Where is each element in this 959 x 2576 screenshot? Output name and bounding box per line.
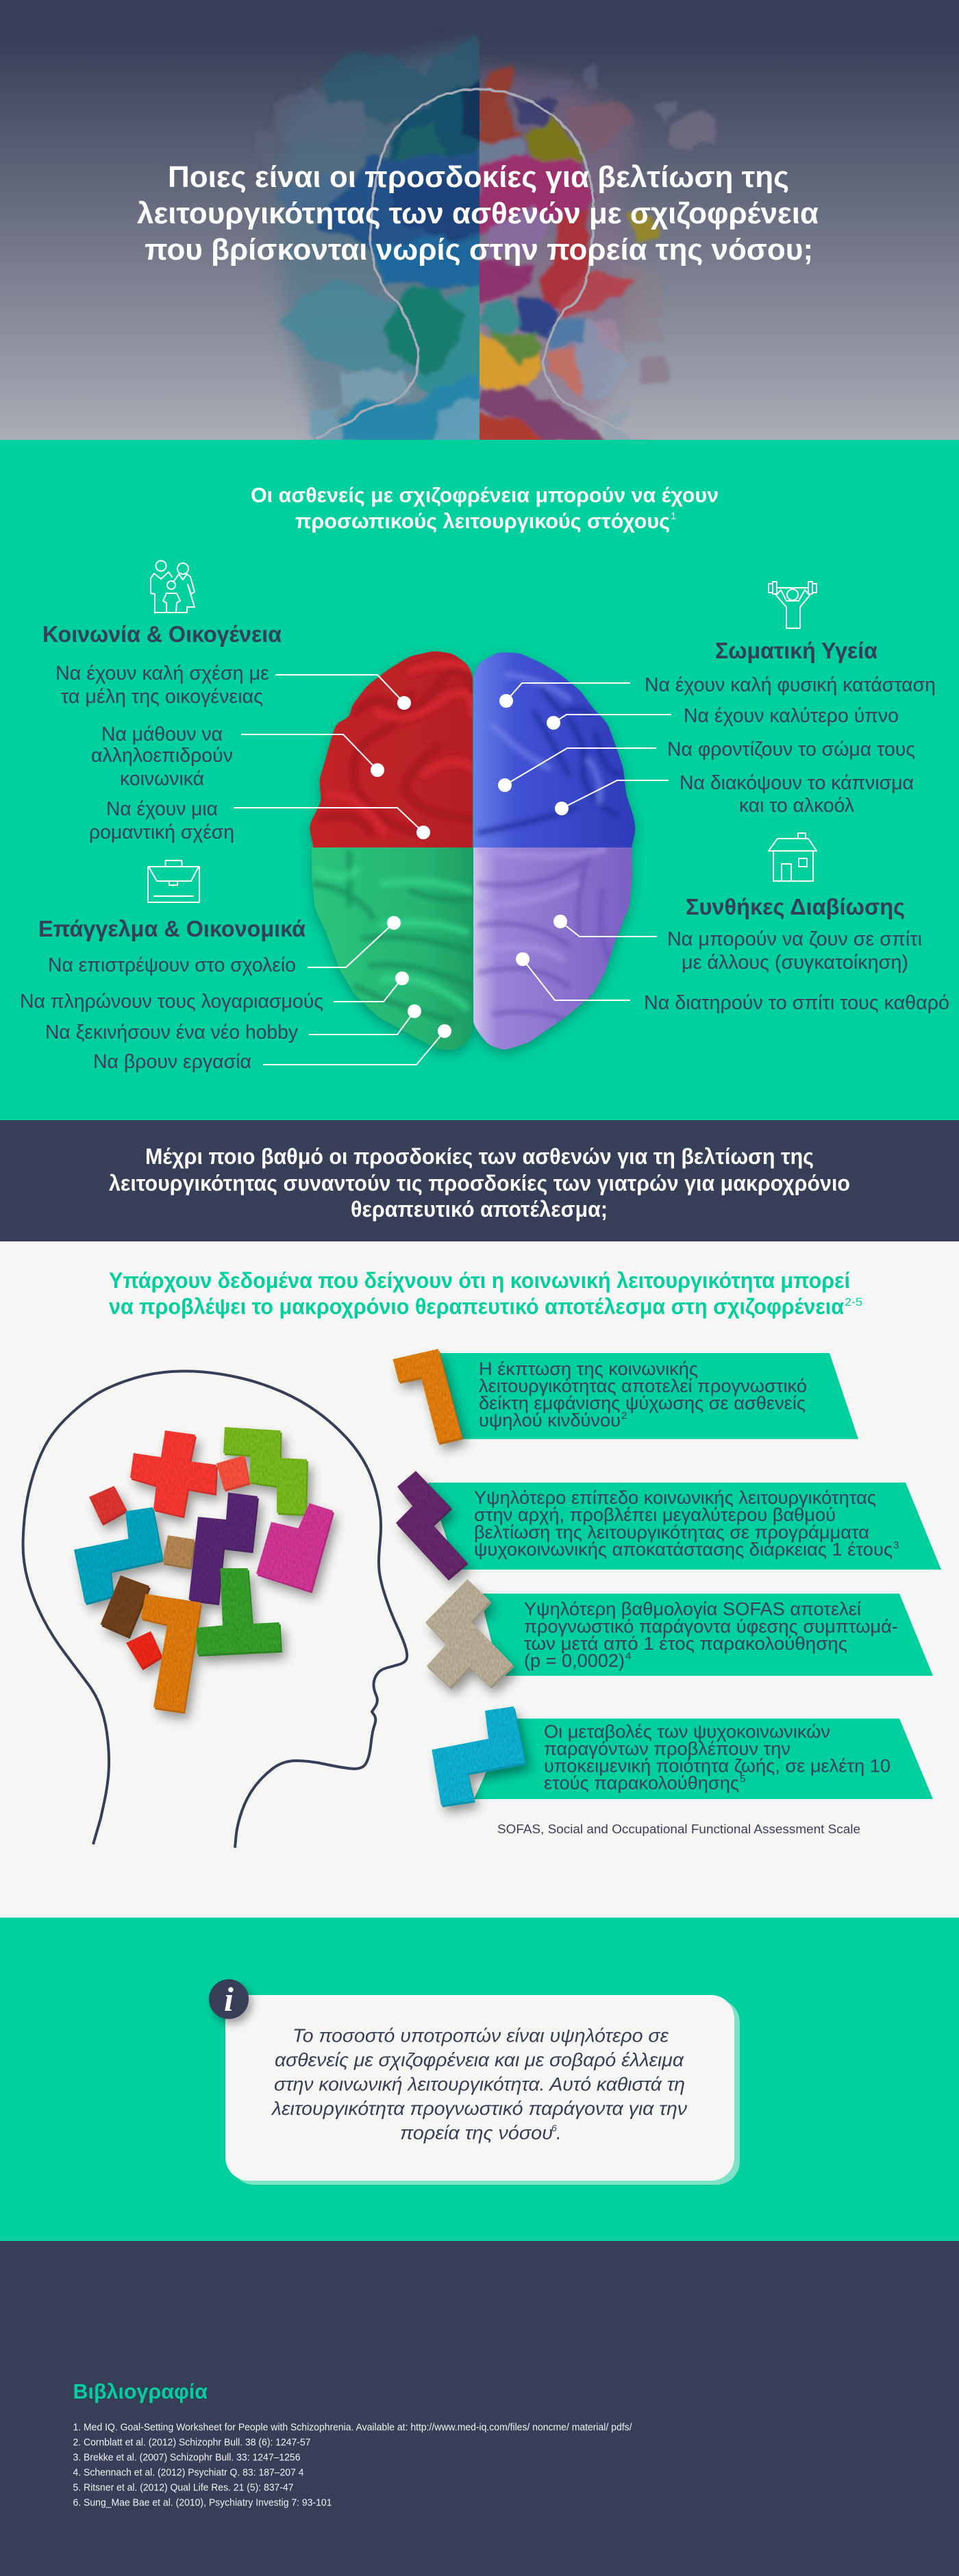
finding 2: βελτίωση της λειτουργικότητας σε προγράμματα	[474, 1522, 869, 1543]
callout text: στην κοινωνική λειτουργικότητα. Αυτό καθιστά τη	[274, 2073, 685, 2095]
occupation and finances goals: Να βρουν εργασία	[93, 1051, 251, 1073]
physical health goals: Να έχουν καλή φυσική κατάσταση	[645, 674, 936, 696]
occupation and finances goals: Να επιστρέψουν στο σχολείο	[48, 954, 296, 976]
finding 1: δείκτη εμφάνισης ψύχωσης σε ασθενείς	[479, 1393, 806, 1413]
finding 1: λειτουργικότητας αποτελεί προγνωστικό	[479, 1376, 807, 1396]
brain illustration	[301, 644, 641, 1062]
physical health goals: Να έχουν καλύτερο ύπνο	[684, 705, 899, 727]
panel: references	[0, 2241, 959, 2576]
finding 4: ετούς παρακολούθησης	[544, 1773, 739, 1794]
finding 2: ψυχοκοινωνικής αποκατάστασης διάρκειας 1 έτους	[474, 1539, 893, 1559]
references list: 3. Brekke et al. (2007) Schizophr Bull. 33: 1247–1256	[73, 2453, 300, 2464]
category heading: occupation and finances: Επάγγελμα & Οικονομικά	[38, 916, 306, 941]
connector lines and dots	[234, 675, 671, 1065]
category heading: living conditions: Συνθήκες Διαβίωσης	[686, 894, 905, 919]
references heading: Βιβλιογραφία	[73, 2379, 208, 2403]
brain: blue quadrant	[473, 644, 641, 863]
head outline	[318, 89, 636, 438]
question text: Μέχρι ποιο βαθμό οι προσδοκίες των ασθενών για τη βελτίωση της	[145, 1144, 814, 1169]
question text: θεραπευτικό αποτέλεσμα;	[351, 1197, 608, 1222]
panel: hero	[0, 0, 959, 445]
section heading: προσωπικούς λειτουργικούς στόχους	[295, 509, 670, 533]
society and family goals: τα μέλη της οικογένειας	[61, 686, 263, 708]
references list: 4. Schennach et al. (2012) Psychiatr Q. 83: 187–207 4	[73, 2468, 304, 2479]
question text	[109, 1144, 850, 1222]
finding 4: υποκειμενική ποιότητα ζωής, σε μελέτη 10	[544, 1755, 891, 1776]
section heading: 2-5	[845, 1296, 862, 1309]
panel: personal functional goals	[0, 440, 959, 1120]
icon: weightlifter	[769, 582, 817, 628]
icon: house	[769, 833, 817, 881]
icon: briefcase	[148, 860, 199, 902]
finding 4: παραγόντων προβλέπουν την	[544, 1739, 790, 1759]
panel: question band	[0, 1120, 959, 1241]
callout text: ασθενείς με σχιζοφρένεια και με σοβαρό έλλειμα	[275, 2049, 684, 2070]
finding 3: Υψηλότερη βαθμολογία SOFAS αποτελεί	[524, 1599, 861, 1620]
finding 1	[393, 1349, 858, 1443]
title: λειτουργικότητας των ασθενών με σχιζοφρένεια	[137, 197, 819, 230]
society and family goals: Να μάθουν να	[101, 723, 223, 745]
references list: 2. Cornblatt et al. (2012) Schizophr Bull. 38 (6): 1247-57	[73, 2438, 311, 2449]
watercolor left half of head	[252, 33, 486, 445]
panel: relapse callout	[0, 1918, 959, 2241]
finding 2: Υψηλότερο επίπεδο κοινωνικής λειτουργικότητας	[474, 1487, 876, 1508]
living conditions goals: με άλλους (συγκατοίκηση)	[682, 952, 908, 974]
physical health goals: Να φροντίζουν το σώμα τους	[667, 739, 915, 760]
finding 3: προγνωστικό παράγοντα ύφεσης συμπτωμά-	[524, 1616, 898, 1637]
brain: red quadrant	[304, 650, 475, 854]
finding 2	[396, 1471, 941, 1578]
finding 1: 2	[621, 1410, 627, 1422]
callout text: .	[556, 2122, 562, 2143]
references list: 1. Med IQ. Goal-Setting Worksheet for People with Schizophrenia. Available at: http://www.med-iq.com/files/ noncme/ material/ pdfs/	[73, 2423, 632, 2433]
section heading: να προβλέψει το μακροχρόνιο θεραπευτικό αποτέλεσμα στη σχιζοφρένεια	[109, 1294, 844, 1319]
occupation and finances goals: Να ξεκινήσουν ένα νέο hobby	[45, 1021, 298, 1043]
section heading: Υπάρχουν δεδομένα που δείχνουν ότι η κοινωνική λειτουργικότητα μπορεί	[109, 1268, 850, 1293]
occupation and finances goals: Να πληρώνουν τους λογαριασμούς	[20, 991, 323, 1013]
living conditions goals	[644, 928, 949, 1014]
finding 4: Οι μεταβολές των ψυχοκοινωνικών	[544, 1721, 830, 1742]
head profile outline	[23, 1371, 407, 1848]
society and family goals: Να έχουν μια	[106, 798, 218, 820]
callout text: Το ποσοστό υποτροπών είναι υψηλότερο σε	[292, 2025, 669, 2046]
title: Ποιες είναι οι προσδοκίες για βελτίωση της	[168, 160, 789, 194]
icon: info	[209, 1979, 249, 2019]
living conditions goals: Να διατηρούν το σπίτι τους καθαρό	[644, 992, 949, 1014]
finding 1: Η έκπτωση της κοινωνικής	[479, 1359, 698, 1379]
finding 3: των μετά από 1 έτος παρακολούθησης	[524, 1633, 847, 1654]
icon: info: i	[224, 1980, 234, 2018]
section heading	[251, 483, 719, 533]
section heading: Οι ασθενείς με σχιζοφρένεια μπορούν να έχουν	[251, 483, 719, 507]
occupation and finances goals	[20, 954, 323, 1073]
section heading: 1	[671, 510, 676, 522]
brain: green quadrant	[306, 847, 478, 1059]
references list: 6. Sung_Mae Bae et al. (2010), Psychiatry Investig 7: 93-101	[73, 2498, 332, 2509]
panel: social functioning predictors	[0, 1241, 959, 1918]
section heading	[109, 1268, 862, 1319]
society and family goals: ρομαντική σχέση	[89, 821, 234, 843]
brain: purple quadrant	[471, 847, 638, 1058]
finding 2: 3	[893, 1539, 899, 1551]
finding 3: (p = 0,0002)	[524, 1650, 625, 1671]
living conditions goals: Να μπορούν να ζουν σε σπίτι	[667, 928, 922, 950]
question text: λειτουργικότητας συναντούν τις προσδοκίες των γιατρών για μακροχρόνιο	[109, 1171, 850, 1196]
callout text	[271, 2025, 687, 2143]
icon: family	[151, 560, 195, 613]
finding 3: 4	[625, 1650, 631, 1662]
physical health goals	[645, 674, 936, 817]
callout card	[225, 1995, 740, 2185]
footnote: SOFAS: SOFAS, Social and Occupational Functional Assessment Scale	[497, 1822, 860, 1836]
category heading: physical health: Σωματική Υγεία	[715, 638, 877, 663]
category heading: society and family: Κοινωνία & Οικογένεια	[42, 621, 282, 647]
callout text: πορεία της νόσου	[400, 2122, 553, 2143]
physical health goals: Να διακόψουν το κάπνισμα	[680, 772, 914, 794]
society and family goals: Να έχουν καλή σχέση με	[55, 662, 269, 684]
finding 2: στην αρχή, προβλέπει μεγαλύτερου βαθμού	[474, 1504, 836, 1525]
society and family goals: κοινωνικά	[120, 768, 204, 790]
callout text: λειτουργικότητα προγνωστικό παράγοντα για την	[271, 2098, 687, 2119]
puzzle pieces inside the head	[74, 1427, 333, 1711]
society and family goals: αλληλοεπιδρούν	[91, 745, 233, 767]
title	[137, 160, 819, 267]
society and family goals	[55, 662, 269, 843]
finding 3	[425, 1579, 933, 1687]
references list: 5. Ritsner et al. (2012) Qual Life Res. 21 (5): 837-47	[73, 2483, 293, 2494]
finding 1: υψηλού κινδύνου	[479, 1410, 621, 1431]
finding 4	[432, 1707, 933, 1805]
watercolor right half of head	[476, 64, 717, 445]
finding 4: 5	[740, 1773, 745, 1785]
physical health goals: και το αλκοόλ	[739, 795, 854, 817]
references list	[73, 2423, 632, 2509]
callout text: 6	[551, 2122, 557, 2133]
title: που βρίσκονται νωρίς στην πορεία της νόσου;	[145, 233, 813, 267]
